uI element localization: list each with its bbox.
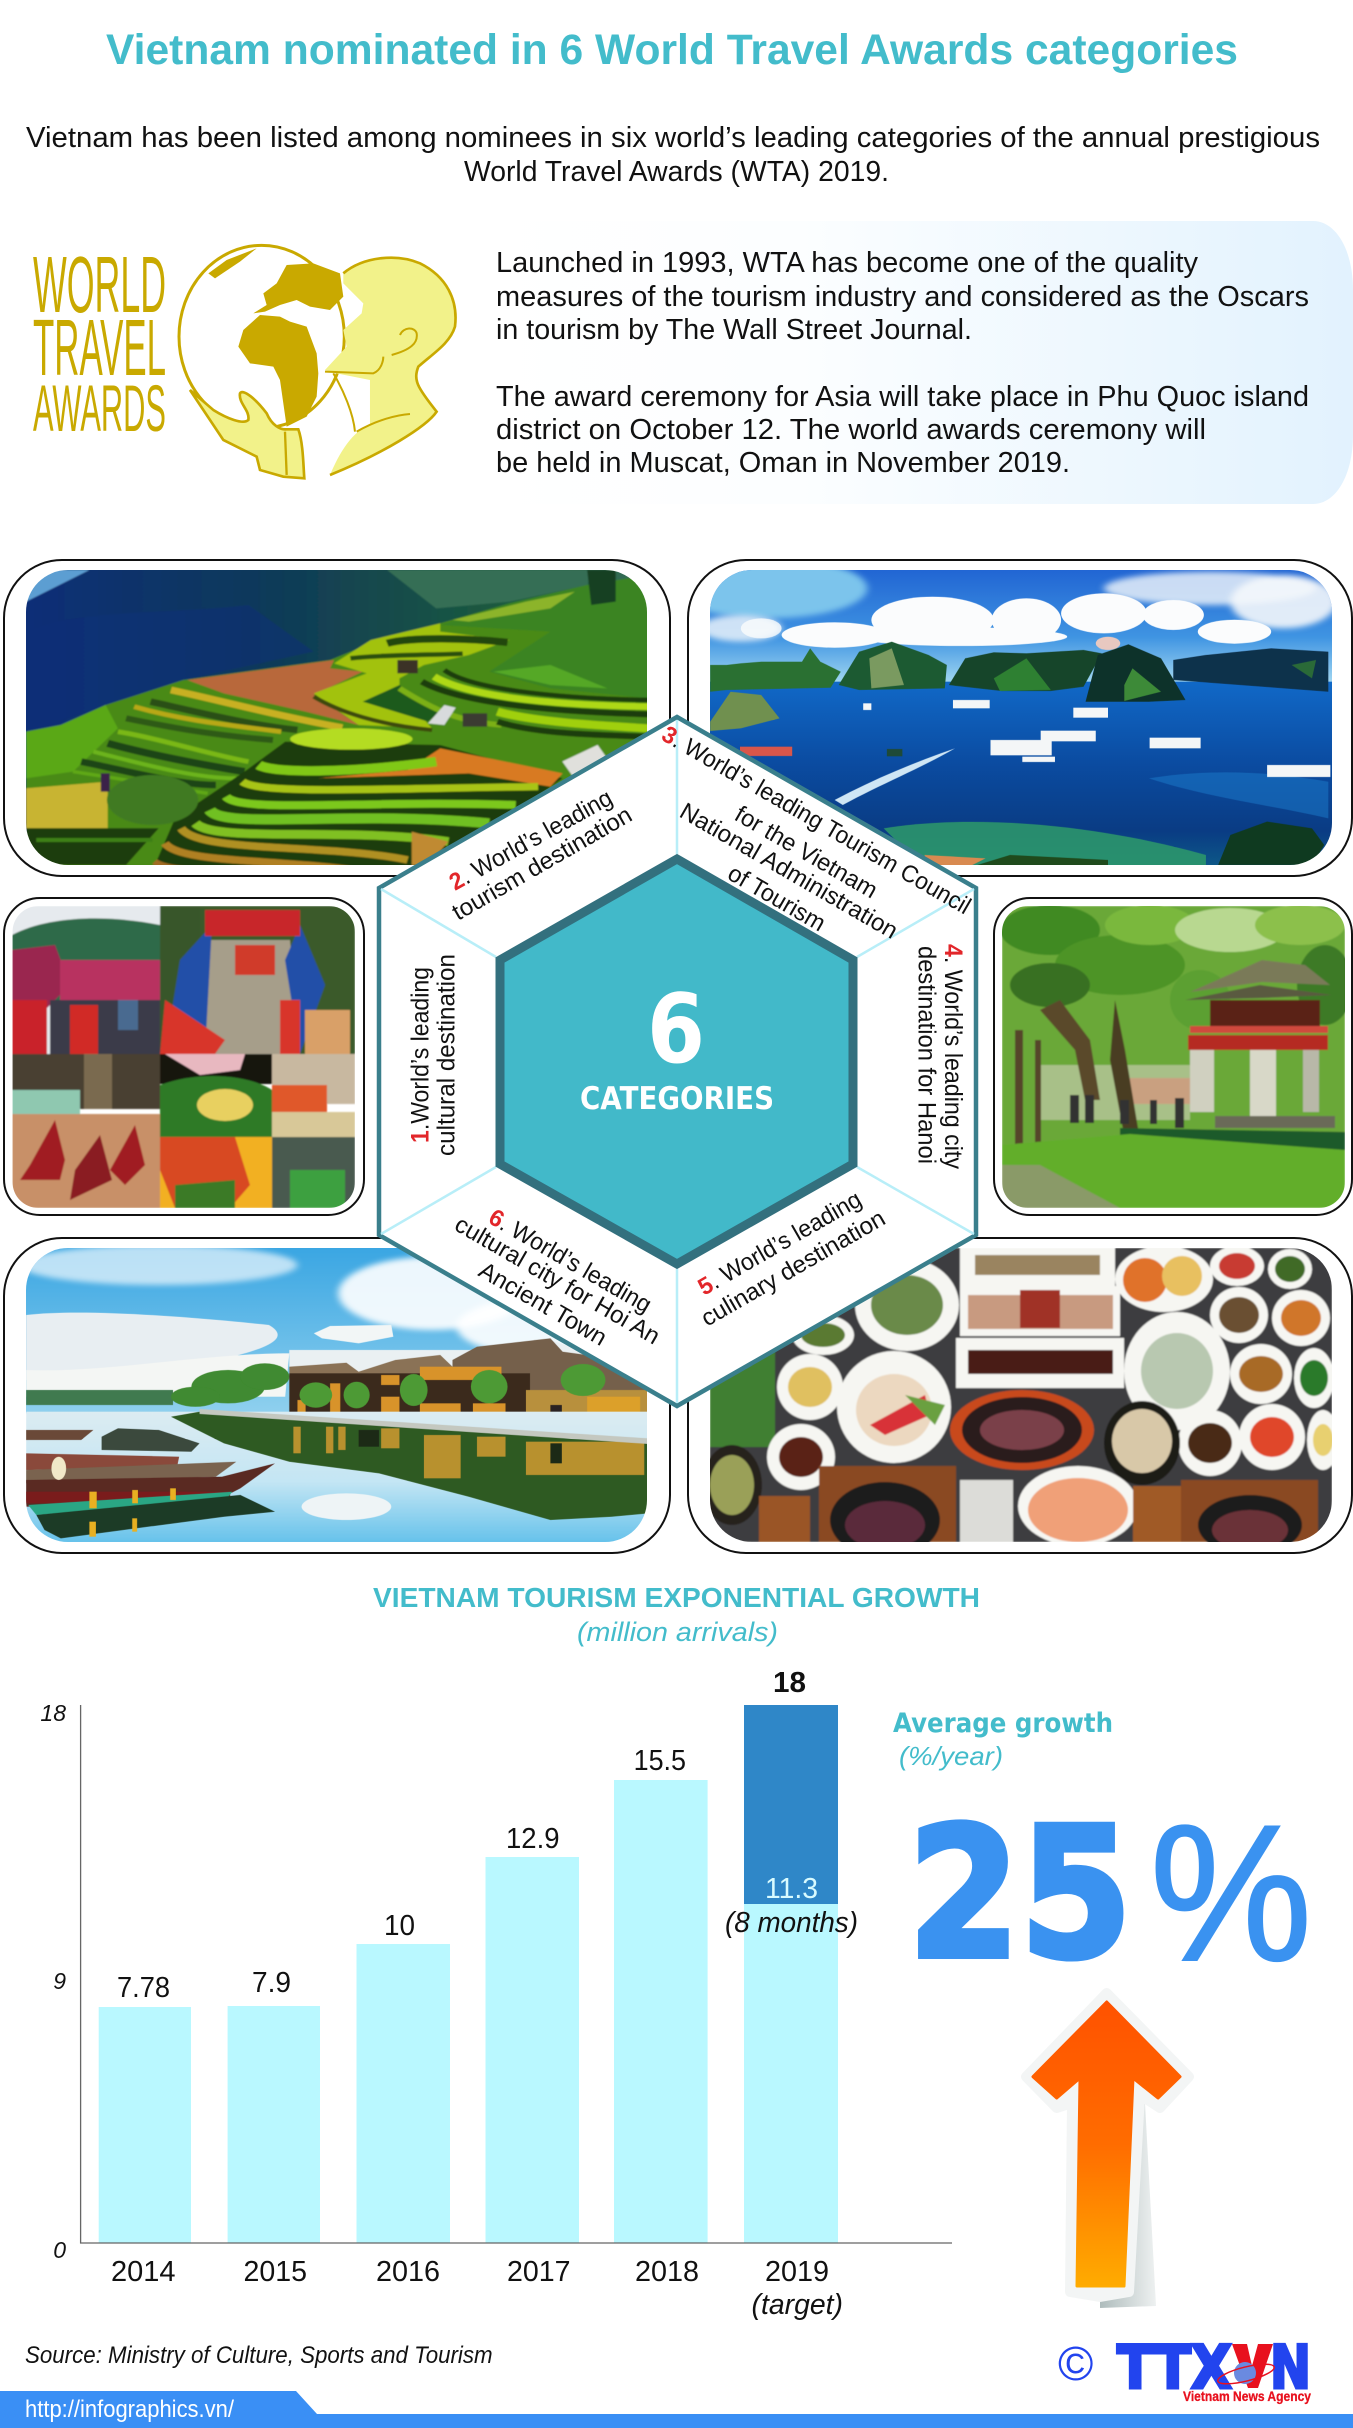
y axis labels: 0 bbox=[53, 2237, 66, 2263]
logo wordmark bbox=[33, 240, 166, 445]
photo: Vietnamese food bbox=[702, 1246, 1339, 1558]
year labels: 2018 bbox=[635, 2256, 699, 2288]
center label: CATEGORIES bbox=[580, 1081, 774, 1117]
value labels: 11.3 bbox=[765, 1873, 818, 1905]
year labels: 2015 bbox=[244, 2256, 307, 2288]
category 6: Ancient Town bbox=[474, 1257, 611, 1352]
category 3: National Administration bbox=[675, 798, 902, 945]
y axis labels: 9 bbox=[53, 1968, 66, 1994]
year labels: 2019 bbox=[765, 2256, 829, 2288]
center number: 6 bbox=[647, 975, 705, 1085]
intro text bbox=[26, 122, 1320, 188]
panel frame: food photo bbox=[688, 1238, 1352, 1558]
average growth heading: (%/year) bbox=[899, 1741, 1003, 1771]
outer hexagon bbox=[379, 717, 976, 1406]
source: Source: Ministry of Culture, Sports and Tourism bbox=[25, 2342, 493, 2369]
year labels: (target) bbox=[752, 2289, 843, 2321]
panel frame: Hoi An photo bbox=[4, 1238, 670, 1553]
title: Vietnam nominated in 6 World Travel Awards categories bbox=[106, 26, 1238, 74]
year labels: 2014 bbox=[111, 2256, 176, 2288]
logo: World Travel Awards: WORLD bbox=[33, 240, 166, 329]
logo: TTXVN: Vietnam News Agency bbox=[1183, 2388, 1311, 2404]
category 4: destination for Hanoi bbox=[912, 946, 940, 1164]
average growth heading bbox=[893, 1708, 1113, 1771]
panel frame: Ha Long Bay photo bbox=[671, 558, 1352, 876]
category 3: for the Vietnam bbox=[730, 801, 882, 904]
year labels bbox=[111, 2256, 843, 2321]
value labels: 15.5 bbox=[634, 1745, 686, 1777]
value labels: 18 bbox=[773, 1667, 806, 1699]
y axis labels: 18 bbox=[40, 1700, 66, 1726]
category 1 bbox=[406, 954, 460, 1156]
about WTA text: district on October 12. The world awards ceremony will bbox=[496, 414, 1206, 446]
logo: World Travel Awards: AWARDS bbox=[33, 371, 166, 445]
footer bar bbox=[0, 2391, 1353, 2428]
logo globe and figure bbox=[179, 245, 456, 478]
panel frame: festival collage bbox=[4, 898, 364, 1215]
intro text: Vietnam has been listed among nominees in six world’s leading categories of the annual prestigious bbox=[26, 122, 1320, 154]
logo: World Travel Awards: TRAVEL bbox=[33, 303, 166, 392]
category 4 bbox=[912, 944, 967, 1169]
chart heading: (million arrivals) bbox=[577, 1617, 778, 1647]
photo: rice terraces bbox=[20, 565, 660, 877]
category 2: tourism destination bbox=[448, 801, 637, 926]
intro text: World Travel Awards (WTA) 2019. bbox=[464, 156, 889, 188]
category 3: 3. World’s leading Tourism Council bbox=[657, 721, 975, 920]
category 1: cultural destination bbox=[432, 954, 460, 1156]
value labels: 7.9 bbox=[252, 1967, 291, 1999]
chart heading: VIETNAM TOURISM EXPONENTIAL GROWTH bbox=[373, 1582, 980, 1613]
logo: TTXVN bbox=[1117, 2333, 1311, 2404]
category 5: culinary destination bbox=[696, 1205, 890, 1332]
about WTA text: measures of the tourism industry and considered as the Oscars bbox=[496, 281, 1309, 313]
category 3: of Tourism bbox=[723, 860, 830, 937]
value labels bbox=[117, 1667, 858, 2004]
photo: Hoi An bbox=[20, 1240, 660, 1552]
value labels: 12.9 bbox=[506, 1823, 560, 1855]
y axis labels bbox=[40, 1700, 66, 2263]
panel frame: rice terraces photo bbox=[4, 560, 670, 877]
copyright symbol: © bbox=[1058, 2338, 1093, 2391]
category 4: 4 . World’s leading city bbox=[939, 944, 967, 1169]
bar 2019 target segment bbox=[744, 1705, 838, 1904]
footer bar: http://infographics.vn/ bbox=[25, 2396, 234, 2423]
about WTA text: be held in Muscat, Oman in November 2019. bbox=[496, 447, 1070, 479]
value labels: 10 bbox=[384, 1910, 415, 1942]
value labels: (8 months) bbox=[725, 1907, 858, 1939]
photo: Ha Long Bay bbox=[710, 570, 1332, 865]
big number: 25 percent: 25 bbox=[908, 1790, 1132, 1999]
big number: 25 percent bbox=[908, 1785, 1312, 2002]
panel: about WTA bbox=[495, 221, 1353, 504]
category 6: cultural city for Hoi An bbox=[450, 1211, 664, 1350]
about WTA text bbox=[496, 247, 1309, 479]
hexagon: six categories bbox=[379, 717, 976, 1406]
average growth heading: Average growth bbox=[893, 1708, 1113, 1739]
logo: TTXVN: N bbox=[1270, 2333, 1311, 2403]
big number: 25 percent: % bbox=[1150, 1785, 1312, 2002]
year labels: 2016 bbox=[376, 2256, 440, 2288]
bars bbox=[99, 1780, 838, 2243]
axes bbox=[81, 1705, 952, 2243]
value labels: 7.78 bbox=[117, 1972, 170, 2004]
icon: orange up arrow bbox=[1026, 1993, 1189, 2308]
chart heading bbox=[373, 1582, 980, 1647]
about WTA text: Launched in 1993, WTA has become one of the quality bbox=[496, 247, 1198, 279]
category 6: 6. World’s leading bbox=[484, 1204, 656, 1319]
photo: festival collage bbox=[12, 906, 355, 1208]
about WTA text: in tourism by The Wall Street Journal. bbox=[496, 314, 972, 346]
about WTA text: The award ceremony for Asia will take place in Phu Quoc island bbox=[496, 381, 1309, 413]
photo: Temple of Literature bbox=[1000, 905, 1353, 1208]
logo: World Travel Awards bbox=[33, 240, 456, 478]
bar chart: arrivals bbox=[40, 1667, 952, 2321]
category 2: 2. World’s leading bbox=[445, 784, 617, 896]
category 1: 1.World’s leading bbox=[406, 967, 434, 1143]
logo: TTXVN: TTX bbox=[1117, 2333, 1232, 2403]
year labels: 2017 bbox=[507, 2256, 570, 2288]
panel frame: Temple of Literature photo bbox=[994, 898, 1353, 1215]
category 5: 5. World’s leading bbox=[694, 1186, 866, 1301]
inner hexagon bbox=[500, 859, 853, 1264]
